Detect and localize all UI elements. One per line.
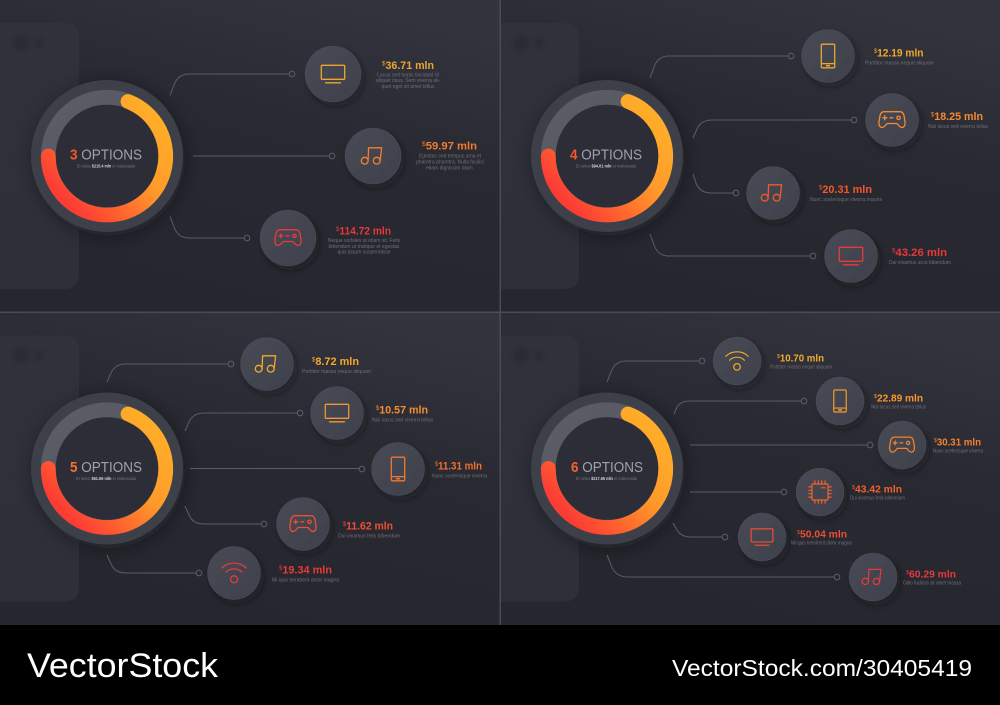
donut label: 5 OPTIONS [70, 460, 142, 476]
item: 59.97 mln: pharetra pharetra. Nulla facilisi [416, 160, 484, 166]
item: 43.42 mln: $ [852, 485, 855, 491]
item: 11.31 mln [190, 442, 487, 496]
watermark url text: VectorStock.com/30405419 [672, 655, 972, 681]
item: 19.34 mln: Mi quis hendrerit dolor magna [272, 578, 339, 584]
item: 18.25 mln: $ [931, 112, 935, 118]
item: 22.89 mln: $ [874, 394, 877, 400]
panel: 3 options [0, 0, 500, 312]
donut label: Et netus $215.4 mln et malesuada [77, 164, 135, 168]
item: 8.72 mln: 8.72 mln [315, 356, 359, 368]
panel: 4 options [500, 0, 1000, 312]
item: 8.72 mln [107, 338, 371, 390]
item: 20.31 mln [693, 166, 883, 220]
item: 22.89 mln [674, 377, 926, 425]
item: 114.72 mln: bibendum ut tristique et egestas [329, 244, 400, 250]
item: 36.71 mln: Lacus sed turpis tincidunt id [377, 72, 439, 78]
item: 60.29 mln: Odio facilisis sit amet massa [903, 580, 961, 586]
item: 43.26 mln [650, 230, 951, 282]
item: 36.71 mln [170, 46, 440, 102]
watermark bar [0, 625, 1000, 705]
item: 30.31 mln: Nunc scelerisque viverra [933, 448, 983, 454]
panel: 6 options [500, 313, 1000, 625]
item: 36.71 mln: aliquet risus. Sem viverra ali- [376, 78, 440, 84]
item: 10.70 mln [607, 337, 832, 385]
item: 18.25 mln: Nisi lacus sed viverra tellus [928, 124, 988, 130]
item: 43.26 mln: $ [892, 248, 896, 254]
item: 43.42 mln [690, 468, 905, 516]
item: 43.42 mln: 43.42 mln [855, 484, 902, 496]
item: 60.29 mln: $ [906, 570, 909, 576]
item: 30.31 mln: $ [934, 438, 937, 444]
item: 59.97 mln: etiam dignissim diam. [426, 165, 474, 171]
phone silhouette [0, 336, 79, 602]
item: 43.26 mln: 43.26 mln [895, 247, 947, 259]
item: 11.62 mln: $ [343, 522, 347, 528]
item: 114.72 mln: quis ipsum suspendisse [337, 250, 391, 256]
item: 59.97 mln: Egestas sed tempus urna et [419, 154, 482, 160]
item: 50.04 mln: $ [797, 530, 800, 536]
item: 59.97 mln [193, 128, 484, 184]
item: 11.31 mln: 11.31 mln [438, 460, 482, 472]
donut label: 4 OPTIONS [570, 147, 642, 163]
panel: 5 options [0, 313, 500, 625]
phone silhouette [500, 23, 579, 289]
phone silhouette [500, 336, 579, 602]
item: 10.57 mln [185, 386, 433, 440]
item: 59.97 mln: $ [422, 141, 426, 148]
item: 22.89 mln: 22.89 mln [877, 394, 923, 404]
item: 10.57 mln: $ [376, 406, 380, 412]
item: 30.31 mln: 30.31 mln [937, 438, 981, 448]
item: 114.72 mln: $ [336, 226, 340, 233]
donut chart [31, 80, 183, 232]
item: 114.72 mln: Neque sodales ut etiam sit. Felis [328, 238, 401, 244]
item: 30.31 mln [690, 421, 983, 469]
item: 11.62 mln: Dui vivamus felis bibendum [338, 534, 400, 540]
item: 10.57 mln: 10.57 mln [379, 404, 428, 416]
donut chart [31, 392, 183, 544]
donut chart [531, 80, 683, 232]
item: 60.29 mln: 60.29 mln [909, 570, 956, 580]
item: 11.31 mln: Nunc scelerisque viverra [432, 474, 487, 480]
item: 19.34 mln: 19.34 mln [282, 564, 332, 576]
item: 43.26 mln: Dui vivamus arcu bibendum [889, 260, 951, 266]
item: 18.25 mln: 18.25 mln [934, 111, 983, 123]
item: 18.25 mln [693, 94, 988, 146]
item: 20.31 mln: $ [819, 186, 823, 192]
item: 12.19 mln: Porttitor massa neque aliquam [865, 61, 934, 67]
item: 10.70 mln: $ [777, 354, 780, 360]
donut chart [531, 392, 683, 544]
item: 8.72 mln: $ [312, 358, 316, 364]
item: 10.70 mln: Porttitor massa neque aliquam [770, 364, 832, 370]
item: 11.62 mln [185, 498, 400, 550]
item: 50.04 mln: 50.04 mln [800, 530, 847, 540]
item: 114.72 mln [170, 210, 401, 266]
item: 10.70 mln: 10.70 mln [780, 354, 824, 364]
donut label: 3 OPTIONS [70, 147, 142, 163]
phone silhouette [0, 23, 79, 289]
item: 10.57 mln: Nisi lacus sed viverra tellus [372, 417, 433, 423]
item: 19.34 mln: $ [279, 566, 283, 572]
item: 20.31 mln: Nunc scelerisque viverra mauris [810, 197, 883, 203]
item: 36.71 mln: $ [382, 60, 386, 68]
item: 59.97 mln: 59.97 mln [426, 140, 477, 152]
item: 22.89 mln: Nisi lacus sed viverra tellus [871, 404, 926, 410]
donut label: 6 OPTIONS [571, 460, 643, 476]
item: 12.19 mln: 12.19 mln [877, 48, 924, 60]
item: 19.34 mln [107, 546, 339, 600]
item: 12.19 mln: $ [874, 49, 878, 55]
item: 36.71 mln: 36.71 mln [386, 60, 434, 72]
donut label: Et netus $217.55 mln et malesuada [576, 476, 637, 481]
item: 11.31 mln: $ [435, 462, 439, 468]
item: 114.72 mln: 114.72 mln [339, 226, 391, 238]
item: 60.29 mln [607, 553, 961, 601]
watermark logo text: VectorStock [27, 647, 219, 685]
item: 36.71 mln: quet eget sit amet tellus [382, 84, 435, 90]
item: 20.31 mln: 20.31 mln [822, 184, 872, 196]
item: 8.72 mln: Porttitor massa neque aliquam [302, 369, 371, 375]
item: 12.19 mln [650, 30, 934, 82]
donut label: Et netus $61.56 mln et malesuada [76, 476, 136, 481]
item: 50.04 mln: Mi quis hendrerit dolor magna [791, 540, 852, 546]
item: 11.62 mln: 11.62 mln [346, 520, 393, 532]
item: 43.42 mln: Dui vivamus felis bibendum [850, 496, 905, 502]
item: 50.04 mln [673, 513, 852, 561]
donut label: Et netus $94.01 mln et malesuada [576, 164, 636, 168]
